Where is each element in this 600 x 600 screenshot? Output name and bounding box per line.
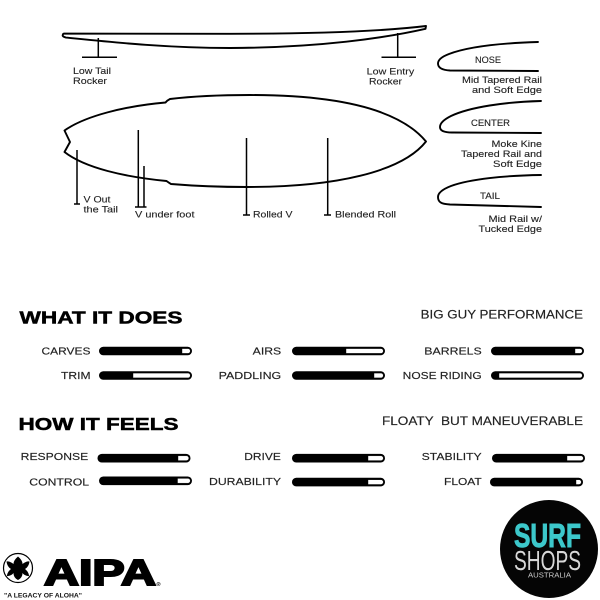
label: barrels: BARRELS [424, 346, 482, 357]
registered mark: ® [156, 581, 161, 588]
panel: bottom contours [64, 95, 426, 220]
entry rocker marker [382, 33, 416, 57]
label: response: RESPONSE [21, 452, 88, 463]
label: nose riding: NOSE RIDING [403, 371, 482, 382]
label: tail: TAIL [480, 191, 500, 201]
logo background circle [500, 500, 598, 598]
marker: v out the tail [74, 150, 80, 204]
label: float: FLOAT [444, 477, 483, 488]
heading: how it feels: HOW IT FEELS [18, 414, 179, 434]
bar: response [98, 454, 190, 462]
label: v out the tail: the Tail [84, 204, 118, 216]
tail rocker marker [82, 38, 117, 57]
panel: rocker profile [63, 26, 426, 88]
bar: drive [292, 454, 385, 462]
bar: stability [492, 454, 585, 462]
label: v out the tail [84, 194, 118, 216]
label: drive: DRIVE [244, 452, 281, 463]
rail: tail [438, 175, 541, 207]
bar: carves [99, 347, 192, 355]
description: center rail: Moke Kine [492, 139, 542, 150]
description: nose rail [462, 75, 542, 96]
label: paddling: PADDLING [219, 371, 281, 382]
description: nose rail: and Soft Edge [472, 85, 542, 96]
bar: nose riding [491, 371, 584, 380]
description: tail rail: Mid Rail w/ [488, 214, 542, 225]
marker: blended roll [324, 138, 331, 215]
label: control: CONTROL [29, 477, 89, 488]
label: center: CENTER [471, 118, 510, 128]
bar: durability [292, 478, 385, 486]
label: airs: AIRS [253, 346, 281, 357]
bar: airs [292, 347, 385, 355]
icon: aipa flower emblem [4, 554, 32, 582]
logo: surf shops australia [500, 500, 598, 598]
label: v out the tail: V Out [84, 194, 111, 206]
description: nose rail: Mid Tapered Rail [462, 75, 542, 86]
wordmark: AIPA: AIPA [44, 552, 156, 593]
panel: rail profiles [438, 42, 542, 235]
marker: rolled v [243, 138, 250, 215]
description: tail rail [478, 214, 542, 235]
marker: v under foot [135, 130, 146, 207]
label: low tail rocker: Low Tail [73, 66, 111, 77]
bar: paddling [292, 371, 385, 380]
wordmark: australia: AUSTRALIA [528, 570, 571, 580]
label: stability: STABILITY [422, 452, 482, 463]
description: center rail [461, 139, 542, 170]
label: v under foot: V under foot [135, 210, 195, 220]
tagline: big guy performance: BIG GUY PERFORMANCE [421, 309, 583, 321]
label: low tail rocker: Rocker [73, 76, 107, 87]
tagline: floaty but maneuverable: FLOATY BUT MANEUVERABLE [382, 416, 583, 428]
label: low tail rocker [73, 66, 111, 87]
label: blended roll: Blended Roll [335, 210, 396, 220]
rail: nose [438, 42, 538, 71]
heading: what it does: WHAT IT DOES [20, 307, 183, 327]
logo: aipa [4, 552, 161, 600]
tagline: a legacy of aloha: "A LEGACY OF ALOHA" [4, 593, 82, 600]
label: durability: DURABILITY [209, 477, 281, 488]
label: trim: TRIM [61, 371, 90, 382]
bar: barrels [491, 347, 584, 355]
rail: center [440, 101, 541, 133]
description: center rail: Soft Edge [493, 159, 542, 170]
label: carves: CARVES [42, 346, 91, 357]
label: low entry rocker: Low Entry [367, 66, 414, 78]
label: low entry rocker: Rocker [369, 76, 402, 88]
label: low entry rocker [367, 66, 414, 88]
label: nose: NOSE [475, 55, 501, 65]
board plan outline [64, 95, 426, 187]
bar: trim [99, 371, 192, 380]
board side profile outline [63, 26, 426, 48]
description: tail rail: Tucked Edge [478, 224, 542, 235]
panel: how it feels [18, 414, 585, 488]
panel: what it does [20, 307, 584, 382]
bar: float [490, 478, 583, 486]
description: center rail: Tapered Rail and [461, 149, 542, 160]
label: rolled v: Rolled V [253, 210, 293, 220]
bar: control [99, 476, 192, 485]
